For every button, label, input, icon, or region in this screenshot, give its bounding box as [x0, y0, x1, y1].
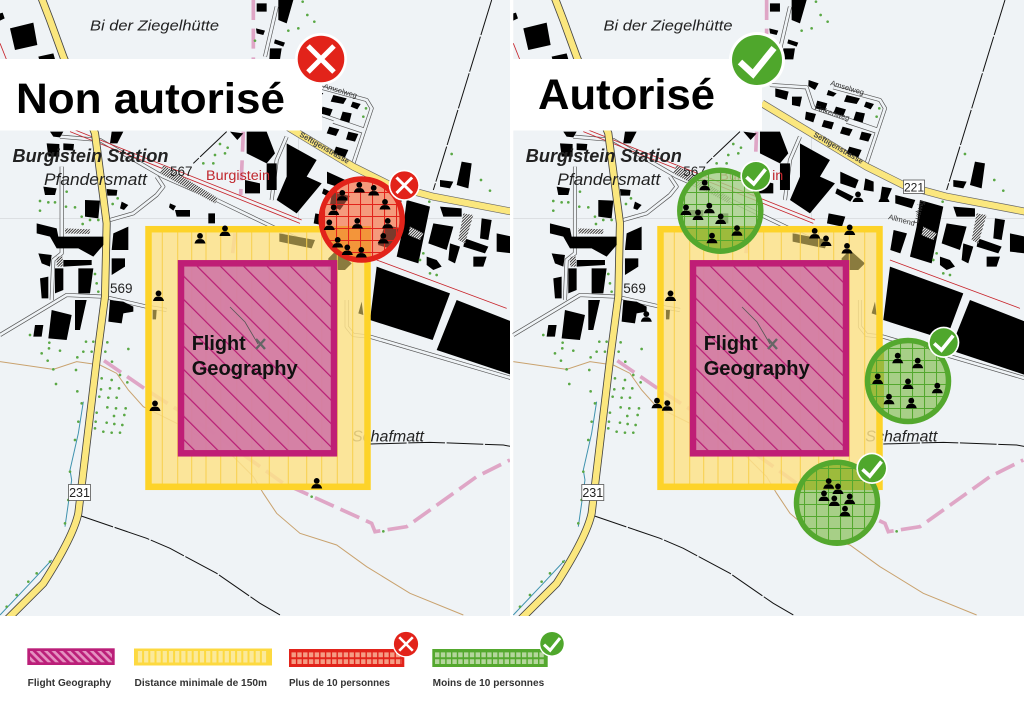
icon: small check 1	[740, 160, 772, 192]
legend item: minimum distance	[134, 648, 272, 689]
icon: large check	[729, 32, 785, 88]
crowd circle: more than 10 people	[318, 176, 405, 263]
map labels right: Seftigenstrasse	[812, 130, 865, 166]
icon: small red cross	[389, 170, 420, 201]
map labels left: Schafmatt	[352, 428, 425, 446]
map labels right: 567	[683, 164, 706, 179]
map labels right: 231	[582, 486, 603, 500]
title banner: autorisé	[512, 59, 762, 130]
panel: autorisé map	[512, 0, 1024, 620]
legend item: more than 10 people: Plus de 10 personnes	[289, 678, 390, 689]
map labels right: Finkenweg	[813, 103, 851, 123]
persons outside crowd left	[150, 226, 322, 488]
map labels left: Burgistein	[206, 168, 270, 183]
map labels left: Amselweg	[322, 81, 358, 100]
map labels right: Ludwig	[911, 199, 926, 225]
legend item: flight geography	[27, 648, 115, 689]
map labels right	[526, 18, 938, 500]
legend	[27, 630, 565, 689]
legend item: flight geography: Flight Geography	[28, 678, 112, 689]
persons outside crowd right	[641, 192, 890, 411]
map labels left: 231	[69, 486, 90, 500]
map labels right: Burgistein	[719, 168, 783, 183]
minimum distance zone right	[660, 229, 880, 487]
flight geography zone right: Geography	[704, 357, 810, 380]
map labels left: Burgistein Station	[12, 146, 168, 166]
icon: large red cross	[295, 33, 347, 85]
map labels right: 221	[904, 180, 924, 194]
base map left	[0, 0, 512, 620]
map labels left: Pfandersmatt	[44, 170, 148, 189]
map labels right: 569	[623, 281, 646, 296]
map labels left: 569	[110, 281, 133, 296]
title banner: autorisé: Autorisé	[538, 71, 715, 119]
flight geography zone left: Flight	[192, 332, 246, 355]
map labels right: Pfandersmatt	[557, 170, 662, 189]
crowd circle 3: fewer than 10 people	[794, 460, 880, 546]
legend item: minimum distance: Distance minimale de 150m	[134, 678, 267, 689]
map labels left	[12, 18, 425, 500]
icon: small check 2	[928, 327, 959, 358]
legend item: more than 10 people	[289, 630, 420, 689]
legend item: fewer than 10 people	[432, 631, 565, 689]
flight geography zone left: Geography	[192, 357, 298, 380]
panel: non autorisé map	[0, 0, 512, 620]
title banner: non autorisé: Non autorisé	[16, 75, 285, 123]
legend item: fewer than 10 people: Moins de 10 personnes	[433, 678, 545, 689]
crowd circle 2: fewer than 10 people	[864, 338, 952, 424]
map labels right: Bi der Ziegelhütte	[604, 18, 732, 34]
flight geography zone right: Flight	[704, 332, 758, 355]
base map right	[513, 0, 1024, 620]
title banner: non autorisé	[0, 59, 322, 130]
flight geography zone left	[181, 263, 334, 453]
map labels left: Seftigenstrasse	[298, 130, 351, 166]
map labels right: Allmend	[887, 212, 916, 228]
map labels right: Amselweg	[829, 78, 865, 97]
minimum distance zone left	[148, 229, 368, 487]
map labels right: Schafmatt	[865, 428, 938, 446]
map labels right: Burgistein Station	[526, 146, 682, 166]
map labels left: 567	[170, 164, 193, 179]
flight geography zone right	[693, 263, 846, 453]
icon: small check 3	[856, 453, 888, 484]
map labels left: Bi der Ziegelhütte	[90, 18, 219, 34]
crowd circle 1: fewer than 10 people	[677, 168, 764, 254]
